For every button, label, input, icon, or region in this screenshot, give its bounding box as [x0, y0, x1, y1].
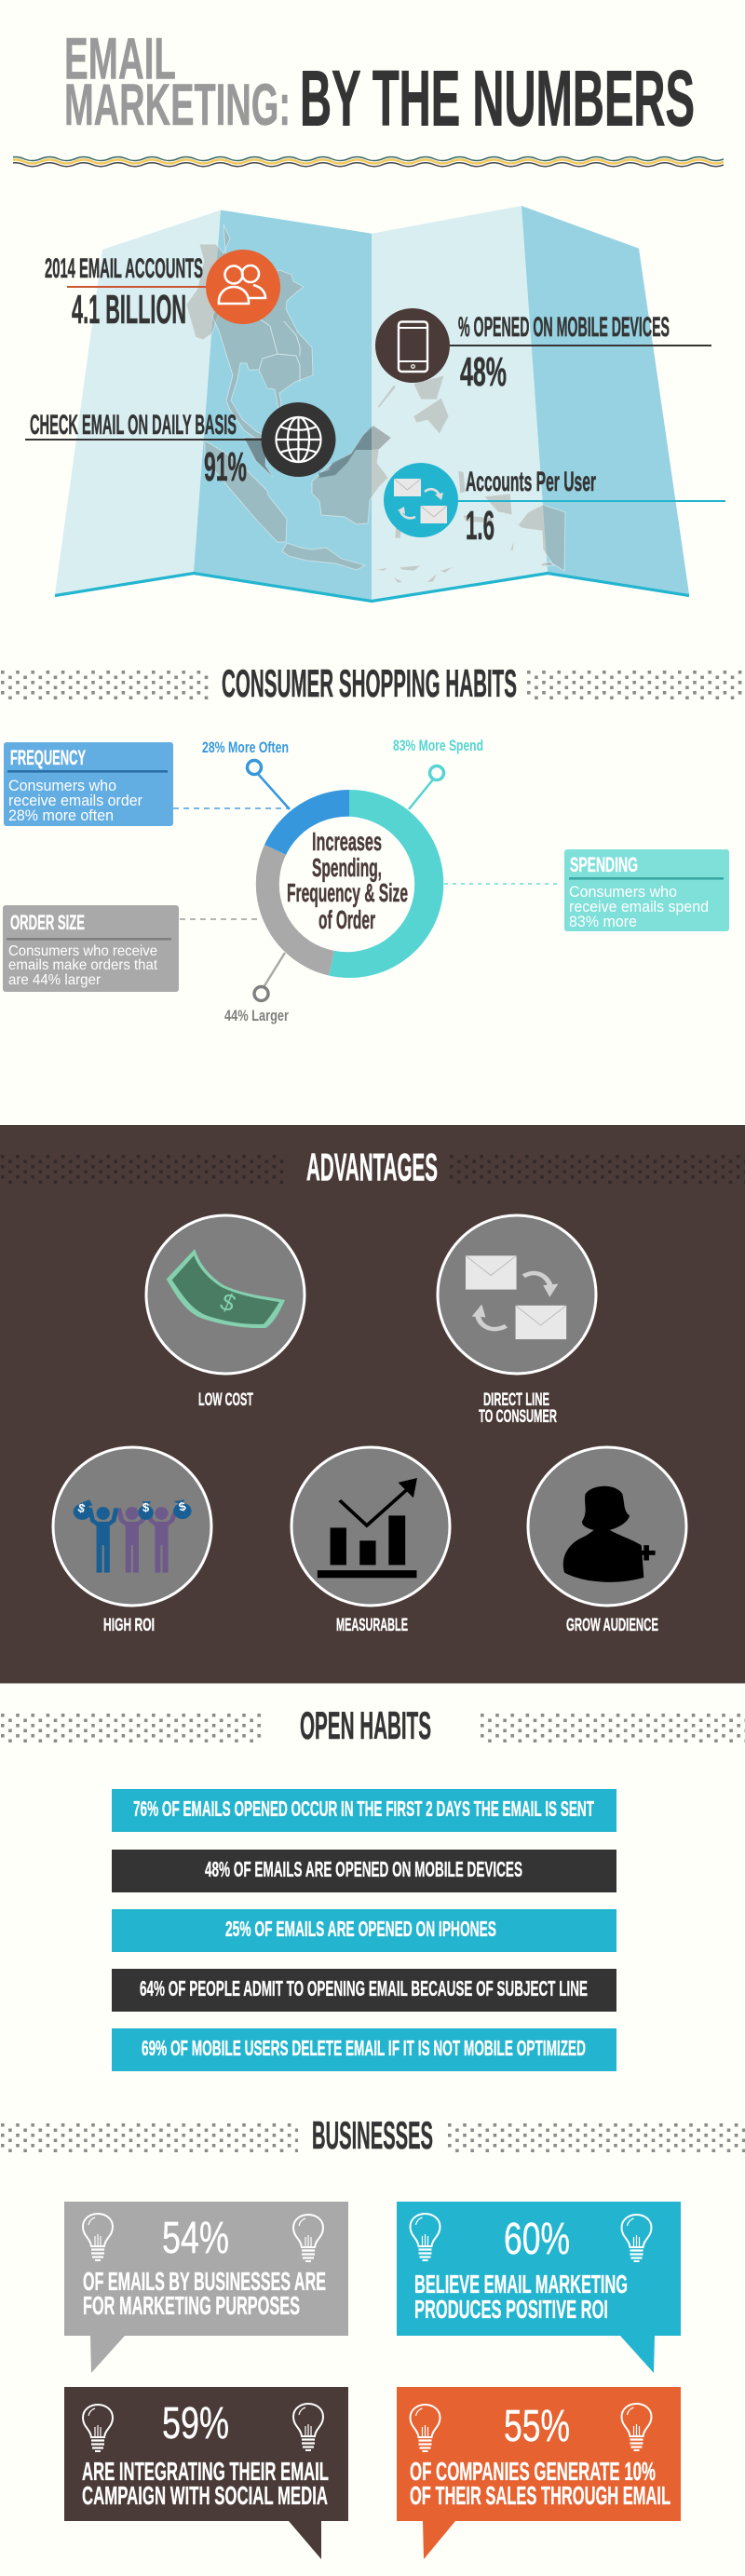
- bar: 48%: [112, 1850, 616, 1892]
- icon: high roi people: $: [142, 1500, 150, 1514]
- pin: order size: [254, 953, 285, 1000]
- dotted band left: [0, 1714, 262, 1742]
- section: businesses: [0, 2113, 745, 2559]
- per user label: Accounts Per User: [466, 467, 596, 497]
- bar: 25%: 25% OF EMAILS ARE OPENED ON IPHONES: [225, 1917, 496, 1941]
- speech bubble: 54%: FOR MARKETING PURPOSES: [83, 2291, 300, 2320]
- callout: frequency: receive emails order: [8, 792, 142, 809]
- icon: people: [206, 250, 280, 324]
- per user rule: [456, 500, 725, 502]
- speech bubble: 60%: PRODUCES POSITIVE ROI: [414, 2295, 608, 2324]
- icon: direct line envelopes: [438, 1215, 596, 1374]
- map: border lines: [256, 317, 300, 382]
- dotted band right: [449, 1155, 745, 1184]
- callout: spending: 83% more: [569, 913, 637, 930]
- speech bubble: 59%: CAMPAIGN WITH SOCIAL MEDIA: [82, 2481, 328, 2510]
- callout: frequency: 28% more often: [8, 807, 114, 824]
- daily rule: [25, 439, 262, 441]
- map: highlighted regions: [244, 426, 391, 478]
- icon: high roi people: $: [177, 1498, 188, 1514]
- section: businesses: BUSINESSES: [312, 2113, 433, 2157]
- dotted band left: [0, 1155, 288, 1184]
- stat: check email daily: CHECK EMAIL ON DAILY BASIS: [30, 410, 237, 441]
- speech bubble: 59%: 59%: [162, 2399, 229, 2448]
- donut chart: [256, 790, 443, 978]
- speech bubble: 55%: 55%: [504, 2402, 570, 2451]
- stat: 2014 email accounts: 2014 EMAIL ACCOUNTS: [45, 253, 203, 284]
- wavy divider: [7, 156, 725, 167]
- accounts rule: [67, 286, 209, 288]
- label: 28% more often: 28% More Often: [202, 739, 289, 756]
- bar: 64%: [112, 1969, 616, 2012]
- section: open habits: OPEN HABITS: [300, 1703, 431, 1747]
- callout: frequency: FREQUENCY: [10, 746, 86, 769]
- icon: low cost money: $: [217, 1287, 237, 1318]
- section: advantages: [0, 1125, 745, 1684]
- dotted band right: [526, 671, 745, 699]
- dotted band right: [447, 2123, 745, 2152]
- section: consumer shopping habits: [0, 661, 745, 1024]
- stat: accounts per user: [384, 463, 725, 549]
- callout: spending: Consumers who: [569, 883, 677, 901]
- callout: frequency: [4, 742, 173, 826]
- icon: email exchange: [384, 463, 458, 537]
- stat: 2014 email accounts: [45, 250, 280, 332]
- callout: spending: receive emails spend: [569, 898, 709, 915]
- label: 83% more spend: 83% More Spend: [393, 737, 483, 754]
- icon: high roi people: $: [76, 1500, 88, 1516]
- donut centre text: Spending,: [312, 853, 382, 882]
- stat: check email daily: [25, 402, 335, 490]
- pin: frequency: [248, 760, 290, 809]
- callout: frequency: Consumers who: [8, 777, 116, 794]
- bar: 69%: [112, 2028, 616, 2071]
- icon: low cost money: [146, 1215, 305, 1374]
- section: advantages: ADVANTAGES: [306, 1146, 438, 1188]
- donut centre text: Frequency & Size: [287, 878, 408, 907]
- callout: order size: ORDER SIZE: [10, 911, 85, 934]
- stat: 2014 email accounts: 4.1 BILLION: [72, 287, 186, 332]
- mobile value: 48%: [460, 349, 507, 395]
- callout: spending: [564, 849, 729, 931]
- donut centre text: of Order: [318, 905, 375, 934]
- mobile rule: [450, 345, 711, 346]
- speech bubble: 60%: [397, 2202, 681, 2373]
- callout: order size: [3, 905, 179, 992]
- caption: high roi: HIGH ROI: [103, 1616, 155, 1635]
- map panel: [55, 206, 689, 602]
- title: [64, 27, 695, 142]
- caption: grow audience: GROW AUDIENCE: [566, 1616, 658, 1635]
- callout: order size: are 44% larger: [8, 972, 102, 988]
- callout: order size: Consumers who receive: [8, 943, 157, 959]
- title: email: EMAIL: [64, 27, 176, 92]
- caption: direct line to consumer: DIRECT LINE: [483, 1390, 549, 1410]
- dark panel: [0, 1125, 745, 1684]
- icon: measurable chart: [291, 1447, 450, 1606]
- daily value: 91%: [204, 444, 247, 490]
- speech bubble: 60%: 60%: [504, 2215, 570, 2264]
- map: land masses: [186, 224, 565, 583]
- dotted band right: [480, 1714, 745, 1742]
- caption: measurable: MEASURABLE: [336, 1616, 408, 1635]
- caption: direct line to consumer: [479, 1390, 557, 1427]
- callout: spending: SPENDING: [570, 853, 638, 876]
- dotted band left: [0, 2123, 298, 2152]
- caption: direct line to consumer: TO CONSUMER: [479, 1407, 557, 1427]
- dotted band left: [0, 671, 210, 699]
- title: marketing: MARKETING:: [64, 73, 291, 138]
- speech bubble: 55%: [397, 2387, 681, 2559]
- map: folded sheet: [55, 206, 689, 602]
- speech bubble: 59%: ARE INTEGRATING THEIR EMAIL: [82, 2457, 329, 2486]
- speech bubble: 54%: [64, 2202, 348, 2373]
- icon: grow audience: [528, 1447, 686, 1606]
- donut centre text: Increases: [312, 827, 382, 856]
- connector: frequency dashes: [173, 807, 290, 809]
- speech bubble: 54%: 54%: [162, 2214, 229, 2263]
- connector: order size dashes: [180, 918, 259, 920]
- pin: spending: [409, 766, 443, 809]
- bar: 25%: [112, 1909, 616, 1952]
- icon: phone: [375, 308, 450, 383]
- stat: opened on mobile: [375, 308, 711, 395]
- section: open habits: [0, 1703, 745, 2071]
- bar: 48%: 48% OF EMAILS ARE OPENED ON MOBILE DEVICES: [205, 1857, 522, 1881]
- donut centre text: [287, 827, 408, 934]
- speech bubble: 54%: OF EMAILS BY BUSINESSES ARE: [83, 2267, 326, 2296]
- icon: high roi people: [53, 1447, 211, 1606]
- caption: low cost: LOW COST: [198, 1390, 253, 1410]
- per user value: 1.6: [466, 503, 494, 549]
- icon: globe: [261, 402, 335, 477]
- label: 44% larger: 44% Larger: [224, 1007, 289, 1024]
- connector: spending dashes: [444, 883, 559, 885]
- speech bubble: 59%: [64, 2387, 348, 2559]
- bar: 76%: [112, 1789, 616, 1832]
- callout: order size: emails make orders that: [8, 957, 158, 973]
